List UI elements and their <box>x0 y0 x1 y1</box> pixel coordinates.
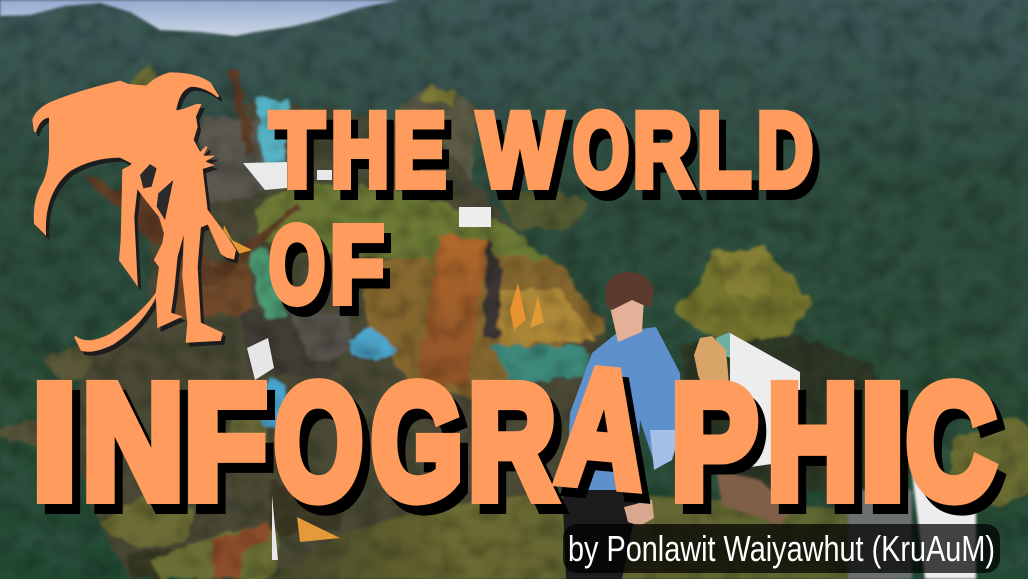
shirt <box>566 327 682 490</box>
island body <box>60 100 612 579</box>
brown cliff under dragon <box>167 262 250 318</box>
rock ledge <box>200 117 290 205</box>
dark bank <box>270 483 345 535</box>
INFOGRAPHIC fill: I <box>860 350 905 533</box>
INFOGRAPHIC fill: O <box>274 350 363 533</box>
title shadow: T <box>277 102 331 219</box>
title fill: W <box>478 92 562 209</box>
grass band <box>253 182 552 262</box>
INFOGRAPHIC shadow: O <box>282 360 371 543</box>
dragonite figure <box>694 332 730 400</box>
white pole <box>272 495 278 560</box>
right olive tree <box>674 247 910 500</box>
blue pool <box>350 327 397 362</box>
stones and white panel <box>848 473 976 579</box>
title shadow: H <box>338 102 396 219</box>
title fill: O <box>573 92 629 209</box>
dark gap by slide <box>482 238 503 340</box>
bottom-right tree <box>950 417 1028 506</box>
OF shadow: O <box>276 214 332 336</box>
title shadow: O <box>580 102 636 219</box>
INFOGRAPHIC fill: N <box>82 350 184 533</box>
mid grass <box>230 415 267 460</box>
green waterfall <box>247 250 288 322</box>
INFOGRAPHIC shadow: I <box>40 360 85 543</box>
title line: INFOGRAPHIC <box>32 333 1004 543</box>
INFOGRAPHIC fill: A <box>552 333 653 523</box>
INFOGRAPHIC fill: I <box>32 350 77 533</box>
orange flag <box>297 517 340 542</box>
lagoon <box>492 345 592 385</box>
title shadow: D <box>764 102 820 219</box>
INFOGRAPHIC fill: C <box>906 350 996 533</box>
neck and face <box>608 298 644 342</box>
white signboard <box>730 333 800 470</box>
OF shadow: F <box>337 214 391 336</box>
hair <box>606 272 654 310</box>
blue waterfall <box>256 97 288 165</box>
INFOGRAPHIC shadow: P <box>679 360 766 543</box>
title line: THE WORLD <box>270 92 820 219</box>
title fill: T <box>270 92 324 209</box>
title shadow: R <box>640 102 699 219</box>
INFOGRAPHIC shadow: F <box>192 360 275 543</box>
blue splash <box>258 378 288 428</box>
title fill <box>270 92 813 209</box>
sky <box>0 0 400 36</box>
INFOGRAPHIC fill: P <box>671 350 758 533</box>
INFOGRAPHIC fill: H <box>767 350 858 533</box>
legs <box>562 480 640 579</box>
stone log <box>716 470 792 525</box>
OF fill: O <box>269 204 325 326</box>
title line: OF <box>269 204 391 336</box>
title shadow: W <box>485 102 569 219</box>
INFOGRAPHIC shadow <box>40 343 1004 543</box>
white signs <box>243 162 491 380</box>
title fill: H <box>331 92 389 209</box>
dirt slope <box>367 255 605 400</box>
OF fill: F <box>330 204 384 326</box>
wooden slide <box>418 236 488 388</box>
dragon body <box>33 73 235 351</box>
title fill: R <box>633 92 692 209</box>
bottom posts <box>210 522 270 579</box>
title shadow: E <box>400 102 453 219</box>
dead tree branches <box>228 70 256 158</box>
title shadow: L <box>704 102 758 219</box>
INFOGRAPHIC shadow: I <box>868 360 913 543</box>
forearm cuff <box>650 430 681 470</box>
lower olive tree <box>100 495 193 550</box>
title shadow <box>277 102 820 219</box>
INFOGRAPHIC fill: R <box>468 350 556 533</box>
INFOGRAPHIC shadow: G <box>379 360 471 543</box>
INFOGRAPHIC fill: F <box>184 350 267 533</box>
title fill: E <box>393 92 446 209</box>
lower grass <box>150 530 277 579</box>
lower rock <box>240 310 340 378</box>
dragon silhouette <box>33 73 238 355</box>
dragon shadow <box>37 77 238 355</box>
INFOGRAPHIC shadow: H <box>775 360 866 543</box>
foreground hill <box>265 490 900 579</box>
distant treetops <box>0 64 590 460</box>
INFOGRAPHIC shadow: N <box>90 360 192 543</box>
INFOGRAPHIC fill <box>32 333 996 533</box>
INFOGRAPHIC fill: G <box>371 350 463 533</box>
man standing <box>562 272 682 579</box>
dragon body gaps <box>140 164 173 220</box>
flames <box>222 225 544 330</box>
scene: floating island <box>0 64 612 579</box>
INFOGRAPHIC shadow: A <box>560 343 661 533</box>
hand <box>624 500 654 526</box>
title fill: D <box>757 92 813 209</box>
INFOGRAPHIC shadow: R <box>476 360 564 543</box>
title fill: L <box>697 92 751 209</box>
